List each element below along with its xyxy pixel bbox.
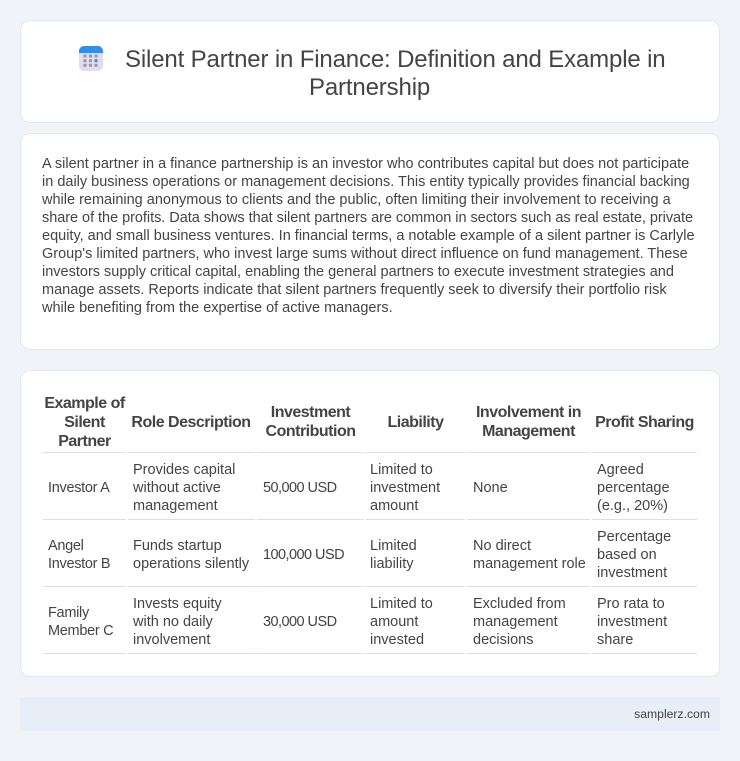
row: Angel Investor B: Percentage: [597, 529, 671, 545]
row: Investor A: Agreed: [597, 462, 644, 478]
table header: Partner: [58, 433, 111, 450]
intro paragraph: manage assets. Reports indicate that silent partners frequently seek to diversify their portfolio risk: [42, 282, 667, 298]
row: Family Member C: invested: [370, 632, 424, 648]
row: Family Member C: Limited to: [370, 596, 433, 612]
title text: [125, 46, 666, 101]
row: Investor A: (e.g., 20%): [597, 498, 668, 514]
table panel: [20, 370, 720, 677]
row: Angel Investor B: 100,000 USD: [263, 547, 344, 563]
row: Family Member C: Member C: [48, 623, 113, 639]
row: Angel Investor B: investment: [597, 565, 667, 581]
row: Family Member C: Invests equity: [133, 596, 222, 612]
row: Family Member C: [48, 596, 668, 648]
intro paragraph: while benefiting from the expertise of active managers.: [42, 300, 393, 316]
title text: Partnership: [309, 74, 430, 101]
table header: Profit Sharing: [595, 414, 694, 431]
row: Family Member C: with no daily: [133, 614, 213, 630]
intro paragraph: Group's limited partners, who invest large sums without direct influence on fund management. These: [42, 246, 688, 262]
row: Investor A: percentage: [597, 480, 670, 496]
row: Angel Investor B: management role: [473, 556, 586, 572]
row: Investor A: Provides capital: [133, 462, 235, 478]
row: Angel Investor B: [48, 529, 671, 581]
row: Angel Investor B: Angel: [48, 538, 84, 554]
row: Family Member C: Pro rata to: [597, 596, 665, 612]
footer bar: [20, 697, 720, 731]
intro paragraph: share of the profits. Data shows that silent partners are common in sectors such as real estate, private: [42, 210, 693, 226]
intro paragraph: [42, 156, 695, 316]
row: Investor A: amount: [370, 498, 418, 514]
intro paragraph: while remaining anonymous to clients and the public, often limiting their involvement to receiving a: [42, 192, 671, 208]
row: Angel Investor B: Investor B: [48, 556, 110, 572]
row: Investor A: Limited to: [370, 462, 433, 478]
row: Family Member C: decisions: [473, 632, 533, 648]
title text: Silent Partner in Finance: Definition and Example in: [125, 46, 666, 73]
row: Angel Investor B: Limited: [370, 538, 417, 554]
row: Family Member C: management: [473, 614, 558, 630]
table header: Silent: [64, 414, 105, 431]
row: Angel Investor B: No direct: [473, 538, 531, 554]
table header: Investment: [271, 404, 350, 421]
row: Family Member C: investment: [597, 614, 667, 630]
row: Family Member C: Family: [48, 605, 89, 621]
row: Family Member C: amount: [370, 614, 418, 630]
row: Family Member C: involvement: [133, 632, 210, 648]
table header: Example of: [44, 395, 125, 412]
row: Family Member C: 30,000 USD: [263, 614, 336, 630]
icon: calendar: [79, 46, 103, 71]
intro paragraph: investors supply critical capital, enabling the general partners to execute investment strategies and: [42, 264, 674, 280]
table header: Involvement in: [476, 404, 581, 421]
table header: [44, 395, 694, 450]
row: Family Member C: Excluded from: [473, 596, 566, 612]
row: Investor A: investment: [370, 480, 440, 496]
intro paragraph: in daily business operations or management decisions. This entity typically provides financial backing: [42, 174, 690, 190]
row: Investor A: [48, 462, 670, 514]
row: Investor A: Investor A: [48, 480, 109, 496]
row: Investor A: management: [133, 498, 218, 514]
row: Angel Investor B: Funds startup: [133, 538, 222, 554]
row: Angel Investor B: based on: [597, 547, 657, 563]
row: Investor A: 50,000 USD: [263, 480, 336, 496]
intro paragraph: equity, and small business ventures. In financial terms, a notable example of a silent partner is Carlyle: [42, 228, 695, 244]
table: [43, 395, 697, 654]
row: Angel Investor B: operations silently: [133, 556, 249, 572]
row: Family Member C: share: [597, 632, 633, 648]
intro paragraph: A silent partner in a finance partnership is an investor who contributes capital but does not participate: [42, 156, 689, 172]
title card: [20, 20, 720, 123]
intro text panel: [20, 133, 720, 350]
table header: Role Description: [131, 414, 251, 431]
footer source text: samplerz.com: [634, 707, 710, 721]
row: Investor A: without active: [133, 480, 221, 496]
table header: Liability: [388, 414, 443, 431]
table header: Management: [482, 423, 575, 440]
table header: Contribution: [266, 423, 355, 440]
row: Angel Investor B: liability: [370, 556, 414, 572]
row: Investor A: None: [473, 480, 508, 496]
